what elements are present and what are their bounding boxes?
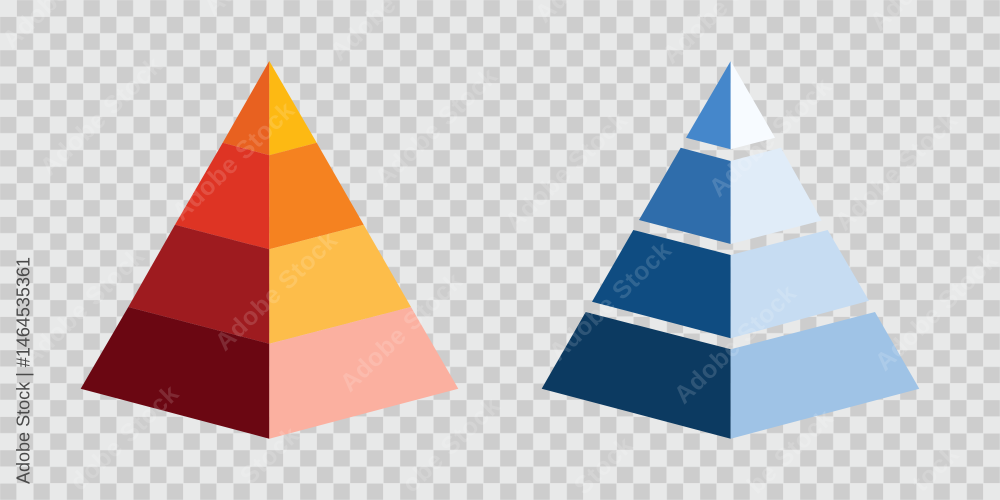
stock watermark overlay: Adobe Stock: [335, 267, 468, 397]
layer 4 (base): dark navy and sky blue: [542, 312, 919, 439]
stock watermark overlay: Stock: [569, 431, 639, 500]
stock watermark overlay: Adobe Stock: [830, 106, 963, 236]
stock watermark overlay: Adobe Stock: [167, 96, 300, 226]
stock watermark overlay: Stock: [235, 421, 305, 490]
stock watermark overlay: Adobe Stock: [370, 62, 503, 192]
stock watermark overlay: Adobe Stock: [17, 242, 150, 372]
layer 3: dark red and yellow: [128, 225, 411, 344]
stock watermark overlay: Adobe Stock: [544, 236, 677, 366]
stock watermark overlay: obe Stock: [397, 392, 505, 498]
vertical credit text: Adobe Stock | #1464535361: [12, 257, 34, 484]
stock watermark overlay: be Stock: [742, 404, 839, 499]
stock watermark overlay: Adobe Stock: [210, 226, 343, 356]
layer 1 (top): mid blue and white: [686, 61, 775, 149]
stock watermark overlay: Adobe Stock: [500, 106, 633, 236]
stock watermark overlay: Adobe Stock: [35, 51, 168, 181]
stock watermark overlay: dobe Stock: [65, 380, 184, 496]
pyramid: red and orange, four joined layers: [81, 61, 458, 439]
layer 1 (top): orange and amber: [223, 61, 317, 155]
stock watermark overlay: Adobe Stock: [669, 279, 802, 409]
layer 2: steel blue and pale blue: [639, 148, 822, 244]
stock watermark overlay: tock: [907, 440, 964, 497]
stock watermark overlay: Adobe Stock: [870, 246, 1000, 376]
layer 2: red and orange: [175, 143, 364, 249]
layer 3: navy and light blue: [592, 230, 869, 338]
pyramid: blue, four separated layers: [542, 61, 919, 439]
layer 4 (base): maroon and salmon: [81, 307, 458, 439]
stock watermark overlay: Adobe Stock: [704, 72, 837, 202]
